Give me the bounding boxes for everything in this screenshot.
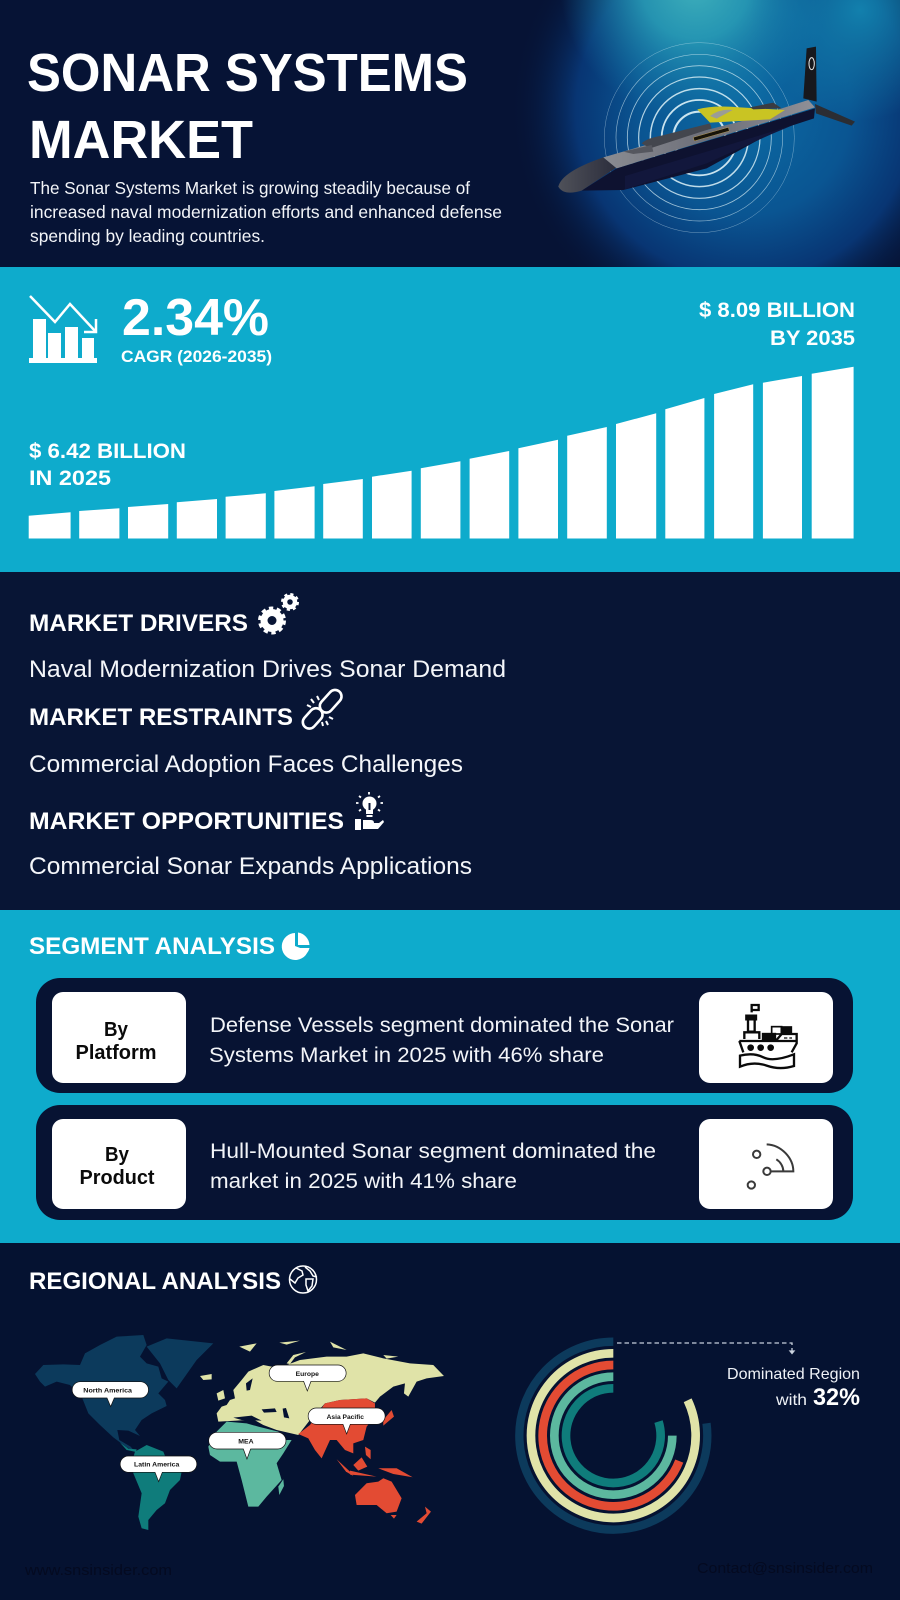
submarine illustration: [558, 47, 855, 193]
2025 value: [29, 439, 186, 490]
panel: market growth: [0, 267, 900, 572]
callout: dominated region: Dominated Region: [727, 1366, 860, 1383]
label text: Platform: [76, 1042, 156, 1064]
callout: middle east and africa: [209, 1432, 286, 1459]
icon: gears: [260, 594, 298, 632]
card: by platform: [36, 978, 853, 1093]
driver text: Naval Modernization Drives Sonar Demand: [29, 656, 506, 683]
label box: [52, 992, 186, 1083]
2035 value: $ 8.09 BILLION: [699, 298, 855, 322]
region: asia pacific: [298, 1398, 431, 1524]
title: MARKET: [29, 110, 253, 170]
footer website: www.snsinsider.com: [24, 1562, 172, 1579]
region: europe and russia: [200, 1341, 444, 1435]
radial bar chart: [519, 1342, 707, 1530]
ocean glow background: [480, 0, 900, 268]
callout: dominated region: 32%: [813, 1384, 860, 1411]
icon box: [699, 992, 833, 1083]
dashed leader arrow: [617, 1343, 794, 1354]
label text: Product: [80, 1167, 155, 1189]
restraint text: Commercial Adoption Faces Challenges: [29, 751, 463, 778]
heading: regional analysis: REGIONAL ANALYSIS: [29, 1268, 281, 1295]
region: latin america: [120, 1443, 182, 1530]
card: by product: [36, 1105, 853, 1220]
sonar rings: [604, 43, 794, 233]
card background: [36, 1105, 853, 1220]
dynamics background: [0, 572, 900, 910]
icon: pie chart: [282, 932, 310, 960]
label text: [76, 1019, 156, 1064]
regional background: [0, 1243, 900, 1600]
callout: europe: [269, 1365, 346, 1391]
icon: chart with trend arrow: [29, 296, 97, 363]
callout: latin america: Latin America: [134, 1462, 180, 1469]
2025 value: IN 2025: [29, 466, 111, 490]
panel: market dynamics: [0, 572, 900, 910]
icon: hand with light bulb: [355, 792, 384, 830]
CAGR label: CAGR (2026-2035): [121, 348, 272, 366]
panel: regional analysis: [0, 1243, 900, 1600]
callout: europe: Europe: [296, 1371, 319, 1378]
opportunity text: Commercial Sonar Expands Applications: [29, 853, 472, 880]
2035 value: BY 2035: [770, 326, 855, 350]
bar chart: [29, 367, 854, 538]
intro text: increased naval modernization efforts and enhanced defense: [30, 202, 502, 222]
icon: broken chain: [300, 687, 344, 731]
footer contact: Contact@snsinsider.com: [697, 1560, 873, 1577]
heading: market drivers: MARKET DRIVERS: [29, 610, 248, 637]
callout: asia pacific: Asia Pacific: [327, 1414, 364, 1421]
intro text: The Sonar Systems Market is growing steadily because of: [30, 178, 470, 198]
card background: [36, 978, 853, 1093]
description: market in 2025 with 41% share: [210, 1169, 517, 1193]
callout: latin america: [120, 1456, 197, 1482]
description: Hull-Mounted Sonar segment dominated the: [210, 1139, 656, 1163]
heading: segment analysis: SEGMENT ANALYSIS: [29, 933, 275, 960]
region: north america: [35, 1335, 213, 1451]
intro text: spending by leading countries.: [30, 226, 265, 246]
description: Defense Vessels segment dominated the Sonar: [210, 1013, 674, 1037]
CAGR value: 2.34%: [122, 289, 269, 347]
icon: globe: [290, 1266, 317, 1293]
callout: middle east and africa: MEA: [238, 1438, 254, 1445]
growth band background: [0, 267, 900, 572]
segment band background: [0, 910, 900, 1243]
label text: By: [104, 1019, 129, 1041]
panel: header: [0, 0, 900, 268]
2035 value: [699, 298, 855, 350]
callout: dominated region: with: [775, 1392, 807, 1409]
icon box: [699, 1119, 833, 1209]
region: middle east and africa: [208, 1422, 292, 1507]
description: [210, 1139, 656, 1193]
title: SONAR SYSTEMS: [27, 43, 468, 103]
header background: [0, 0, 900, 268]
label box: [52, 1119, 186, 1209]
callout: dominated region: [727, 1366, 860, 1411]
world map: [35, 1335, 444, 1530]
callout: asia pacific: [308, 1408, 385, 1434]
callout: north america: North America: [83, 1387, 132, 1394]
icon: ship: [739, 1005, 797, 1068]
inland seas: [233, 1378, 289, 1421]
icon: sonar radar: [748, 1144, 793, 1189]
panel: segment analysis: [0, 910, 900, 1243]
title: [27, 43, 468, 170]
heading: market restraints: MARKET RESTRAINTS: [29, 704, 293, 731]
2025 value: $ 6.42 BILLION: [29, 439, 186, 463]
heading: market opportunities: MARKET OPPORTUNITIES: [29, 808, 344, 835]
callout: north america: [72, 1382, 148, 1407]
intro text: [30, 178, 502, 246]
label text: By: [105, 1144, 130, 1166]
description: [209, 1013, 674, 1067]
label text: [80, 1144, 155, 1189]
description: Systems Market in 2025 with 46% share: [209, 1043, 604, 1067]
